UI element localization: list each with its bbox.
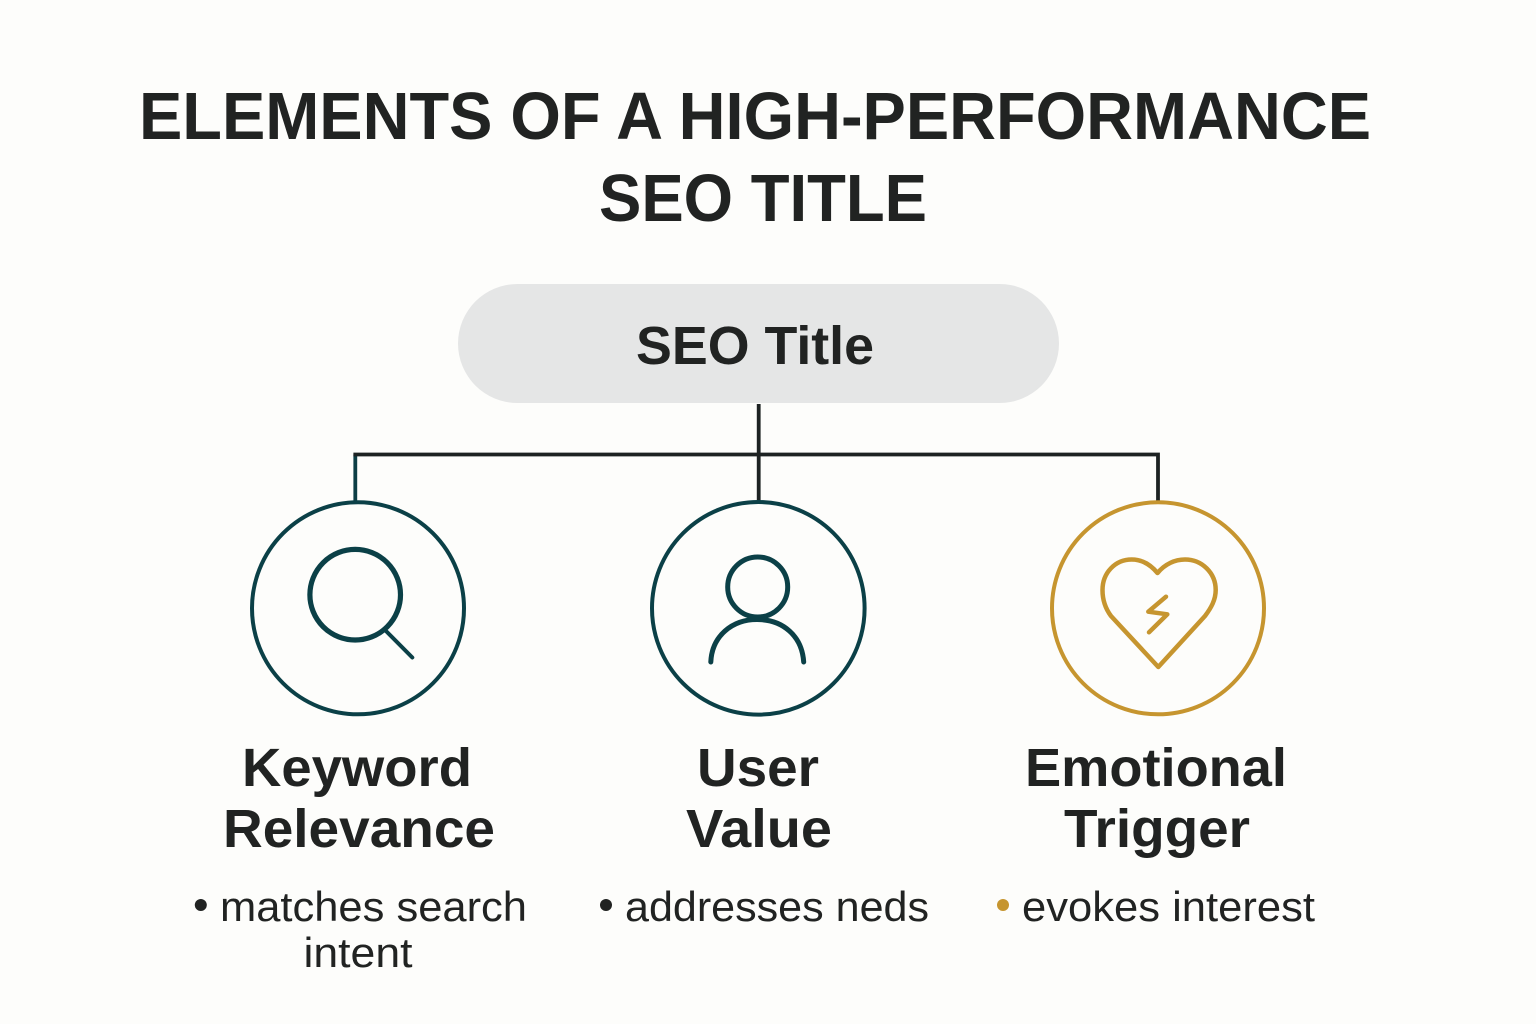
title — [139, 79, 1371, 236]
root node: SEO Title — [458, 284, 1059, 403]
heading: user value: Value — [686, 799, 832, 859]
heading: user value — [686, 738, 832, 859]
title: ELEMENTS OF A HIGH-PERFORMANCE — [139, 79, 1371, 154]
heading: emotional trigger: Emotional — [1025, 738, 1287, 798]
heading: emotional trigger — [1025, 738, 1287, 859]
column: keyword relevance — [195, 502, 527, 976]
icon: user — [652, 502, 865, 715]
heading: emotional trigger: Trigger — [1064, 799, 1250, 859]
heading: user value: User — [697, 738, 819, 798]
text: matches search intent: intent — [304, 929, 413, 976]
icon: heart with bolt — [1052, 502, 1264, 714]
heading: keyword relevance — [223, 738, 495, 859]
column: user value — [600, 502, 929, 930]
text: matches search intent — [195, 883, 527, 976]
column: emotional trigger — [997, 502, 1315, 930]
text: addresses neds: addresses neds — [625, 883, 929, 930]
heading: keyword relevance: Relevance — [223, 799, 495, 859]
heading: keyword relevance: Keyword — [242, 738, 472, 798]
text: evokes interest: evokes interest — [1022, 883, 1315, 930]
title: SEO TITLE — [599, 161, 927, 236]
root node: SEO Title: SEO Title — [636, 316, 874, 376]
icon: magnifying glass — [252, 502, 464, 714]
text: matches search intent: matches search — [220, 883, 527, 930]
connector lines — [353, 404, 1158, 502]
